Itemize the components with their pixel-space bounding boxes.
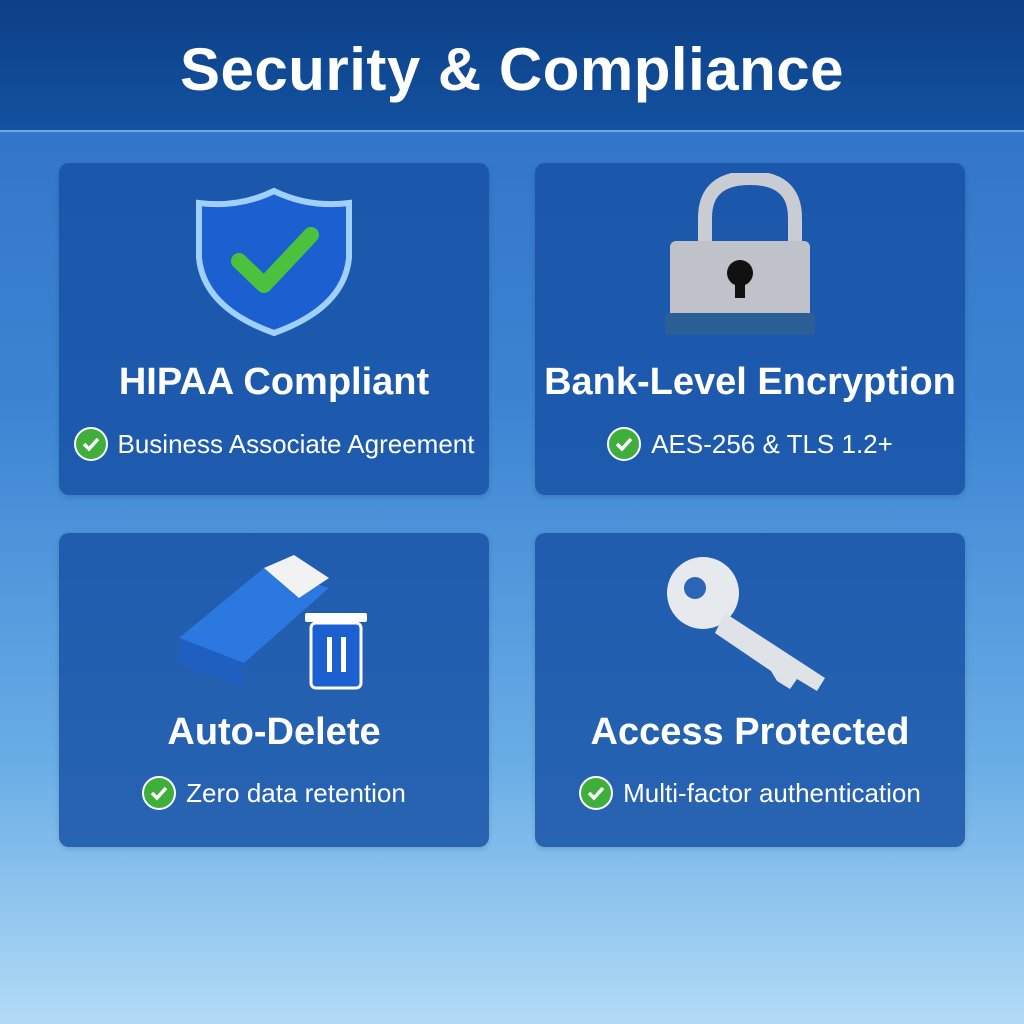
panel: access bbox=[535, 533, 965, 847]
subtext: Multi-factor authentication bbox=[623, 778, 921, 808]
icon: padlock bbox=[665, 173, 815, 335]
heading: Auto-Delete bbox=[167, 711, 381, 753]
icon: shield bbox=[196, 188, 352, 336]
header bbox=[0, 0, 1024, 132]
title: Security & Compliance bbox=[180, 36, 844, 103]
subtext: AES-256 & TLS 1.2+ bbox=[651, 428, 893, 458]
panel: auto-delete bbox=[59, 533, 489, 847]
heading: Access Protected bbox=[591, 711, 909, 753]
panel: encryption bbox=[535, 163, 965, 495]
panel: HIPAA bbox=[59, 163, 489, 495]
subtext: Zero data retention bbox=[186, 778, 406, 808]
icon: eraser and trash bbox=[179, 555, 367, 690]
subtext: Business Associate Agreement bbox=[118, 428, 474, 458]
icon: key bbox=[667, 557, 825, 691]
heading: HIPAA Compliant bbox=[119, 361, 429, 403]
heading: Bank-Level Encryption bbox=[544, 361, 956, 403]
